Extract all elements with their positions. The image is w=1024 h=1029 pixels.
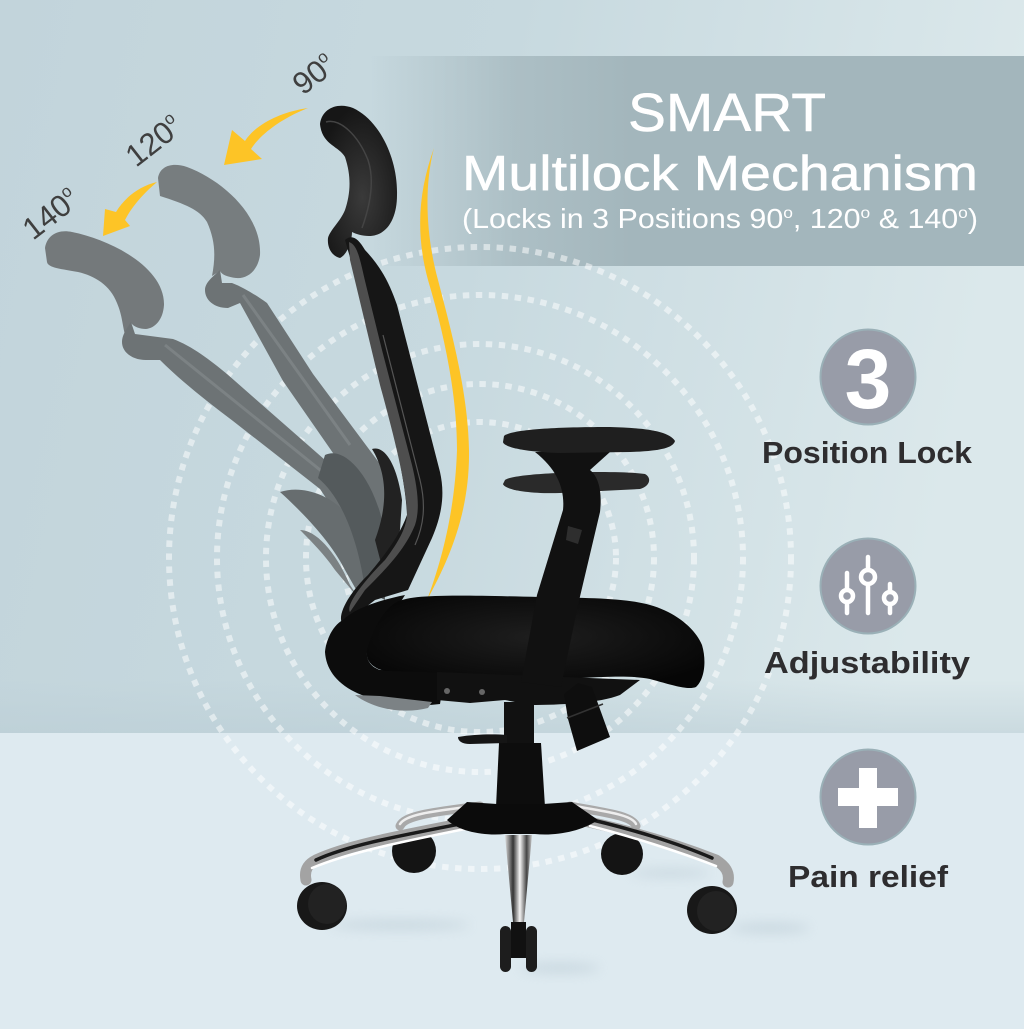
chair: tilt mechanism <box>437 672 640 705</box>
title text <box>462 83 978 234</box>
chair: tension knob <box>564 683 610 751</box>
title text: & 140 <box>870 203 958 234</box>
chair: front casters <box>297 882 737 972</box>
chair: armrest post <box>521 452 610 687</box>
title banner <box>370 56 1024 266</box>
angle labels: o <box>57 181 76 202</box>
chair: star base hub <box>447 802 598 834</box>
feature: pain relief <box>788 750 949 894</box>
label: adjustability: Adjustability <box>764 645 971 680</box>
angle labels <box>16 47 342 247</box>
chair: front chrome legs <box>305 816 728 922</box>
icon: number 3: 3 <box>845 332 891 426</box>
yellow spine curve <box>420 148 469 600</box>
ghost shell shadow <box>355 695 432 711</box>
title text: , 120 <box>793 203 861 234</box>
title text: o <box>783 205 793 222</box>
icon: number 3 <box>820 330 916 426</box>
chair: armrest, lower ghost position <box>503 472 649 493</box>
title text: SMART <box>628 83 826 143</box>
label: position lock: Position Lock <box>762 435 973 470</box>
title text: Multilock Mechanism <box>462 147 978 201</box>
title text: (Locks in 3 Positions 90 <box>462 203 758 234</box>
chair: rear star base legs <box>400 806 636 826</box>
chair: shell under seat <box>325 595 445 705</box>
lumbar support <box>372 448 402 590</box>
ghost overlap shading <box>318 453 385 600</box>
feature: position lock <box>762 330 973 470</box>
angle labels: o <box>160 108 179 129</box>
label: pain relief: Pain relief <box>788 859 949 894</box>
angle labels: o <box>313 47 332 68</box>
yellow arrow: 90 to 120 <box>224 108 308 165</box>
ghost backrest at 120 degrees <box>158 165 390 578</box>
dotted concentric rings <box>169 247 791 869</box>
title text: ) <box>968 203 978 234</box>
title text: o <box>958 205 968 222</box>
angle labels: 90 <box>286 53 334 102</box>
feature: adjustability <box>764 538 971 680</box>
angle labels: 120 <box>119 114 181 174</box>
icon: sliders <box>820 538 916 634</box>
ghost backrest at 140 degrees <box>45 231 379 600</box>
title text: o <box>861 205 870 222</box>
chair: backrest <box>341 237 442 625</box>
angle labels: 140 <box>16 187 78 247</box>
chair: gas lift column <box>458 702 545 807</box>
chair: black headrest <box>320 106 397 258</box>
yellow arrow: 120 to 140 <box>103 182 157 236</box>
chair: rear casters <box>392 829 643 875</box>
chair: armrest pad <box>503 427 675 453</box>
icon: plus <box>820 750 916 844</box>
chair: seat cushion <box>367 596 704 688</box>
floor shadows <box>330 869 810 973</box>
